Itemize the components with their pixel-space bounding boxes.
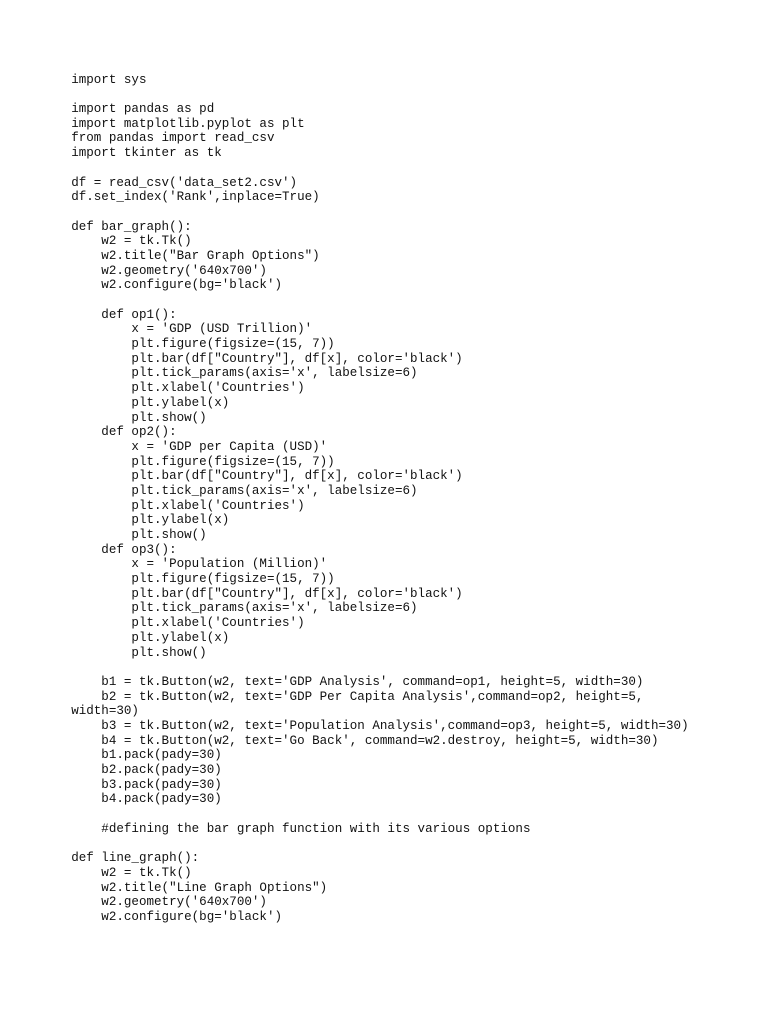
code: comment line: #defining the bar graph function with its various options	[101, 822, 530, 836]
code: buttons: b1 = tk.Button(w2, text='GDP Analysis', command=op1, height=5, width=30) b2 = tk.Button(w2, text='GDP Per Capita Analysis',command=op2, height=5, width=30) b3 = tk.Button(w2, text='Population Analysis',command=op3, height=5, width=30) b4 = tk.Button(w2, text='Go Back', command=w2.destroy, height=5, width=30) b1.pack(pady=30) b2.pack(pady=30) b3.pack(pady=30) b4.pack(pady=30)	[71, 675, 689, 806]
code: line_graph window setup: def line_graph(): w2 = tk.Tk() w2.title("Line Graph Options") w2.geometry('640x700') w2.configure(bg='black')	[71, 851, 327, 924]
code page	[71, 73, 689, 924]
code: load dataset: df = read_csv('data_set2.csv') df.set_index('Rank',inplace=True)	[71, 176, 320, 204]
code: op1 op2 op3 functions: def op1(): x = 'GDP (USD Trillion)' plt.figure(figsize=(15, 7)) plt.bar(df["Country"], df[x], color='black') plt.tick_params(axis='x', labelsize=6) plt.xlabel('Countries') plt.ylabel(x) plt.show() def op2(): x = 'GDP per Capita (USD)' plt.figure(figsize=(15, 7)) plt.bar(df["Country"], df[x], color='black') plt.tick_params(axis='x', labelsize=6) plt.xlabel('Countries') plt.ylabel(x) plt.show() def op3(): x = 'Population (Million)' plt.figure(figsize=(15, 7)) plt.bar(df["Country"], df[x], color='black') plt.tick_params(axis='x', labelsize=6) plt.xlabel('Countries') plt.ylabel(x) plt.show()	[71, 308, 463, 660]
code: bar_graph window setup: def bar_graph(): w2 = tk.Tk() w2.title("Bar Graph Options") w2.geometry('640x700') w2.configure(bg='black')	[71, 220, 320, 292]
code: library imports: import pandas as pd import matplotlib.pyplot as plt from pandas import read_csv import tkinter as tk	[71, 102, 305, 160]
code: import sys: import sys	[71, 73, 146, 87]
